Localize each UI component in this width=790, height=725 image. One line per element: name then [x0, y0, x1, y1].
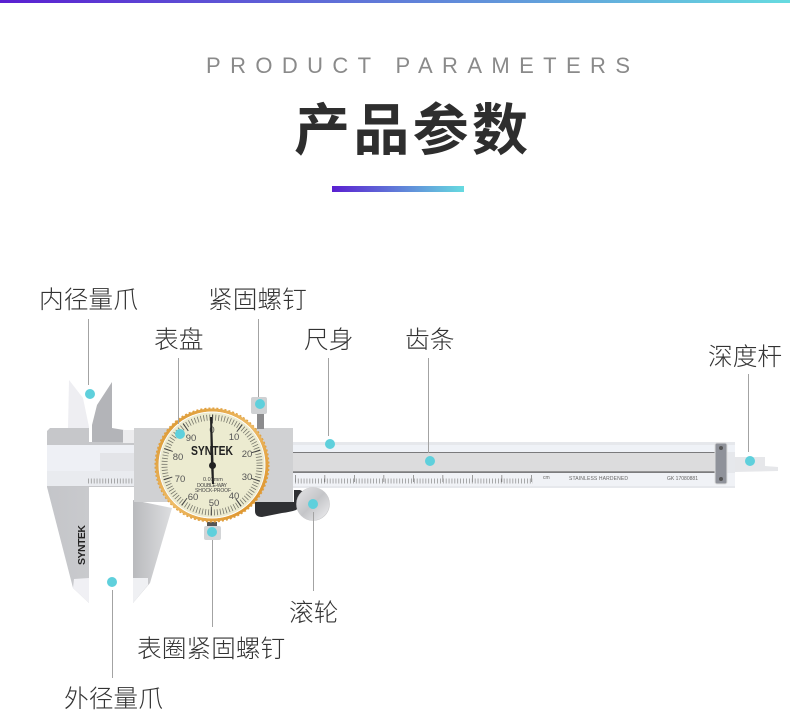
label: rack: 齿条	[405, 326, 454, 354]
dial	[156, 409, 268, 521]
dial: 20	[242, 449, 252, 460]
dial: 80	[173, 452, 183, 463]
dial: 60	[188, 492, 198, 503]
dial small text: 0.01mm	[203, 477, 223, 483]
upper right jaw	[92, 382, 124, 442]
top screw	[251, 397, 267, 429]
top gradient bar	[0, 0, 790, 3]
main beam: STAINLESS HARDENED	[569, 476, 628, 482]
label: inner jaw: 内径量爪	[39, 286, 138, 314]
dial brand: SYNTEK	[191, 443, 233, 458]
major ticks	[166, 419, 258, 511]
main beam: GK 17080881	[667, 476, 698, 482]
head ruler ticks	[88, 478, 134, 484]
thumb roller base	[255, 490, 312, 517]
label: outer jaw: 外径量爪	[64, 685, 163, 713]
subtitle: PRODUCT PARAMETERS	[206, 53, 630, 78]
fixed head	[47, 428, 135, 487]
marker dots	[85, 389, 755, 587]
caliper illustration	[47, 380, 778, 603]
thumb wheel	[296, 488, 330, 520]
ruler text: cm	[543, 475, 550, 481]
minor ticks	[164, 418, 260, 512]
dial: 70	[175, 474, 185, 485]
main beam	[293, 442, 735, 488]
clamp plate	[715, 443, 727, 484]
label: ruler body: 尺身	[304, 326, 353, 354]
dial: SHOCK-PROOF	[195, 488, 231, 494]
dial: 90	[186, 433, 196, 444]
brand text on jaw: SYNTEK	[76, 525, 88, 565]
depth rod	[735, 457, 778, 472]
label: depth rod: 深度杆	[708, 343, 782, 371]
lower left jaw	[47, 487, 89, 603]
title: 产品参数	[294, 99, 528, 162]
lower right jaw	[133, 500, 172, 603]
white strip	[47, 445, 134, 471]
label: bezel set screw: 表圈紧固螺钉	[137, 635, 285, 663]
label: set screw: 紧固螺钉	[208, 286, 307, 314]
ruler ticks	[295, 478, 533, 484]
dial: 40	[229, 491, 239, 502]
dial numbers: 0	[209, 425, 215, 436]
upper left jaw	[68, 380, 89, 442]
dial: DOUBLE-WAY	[197, 483, 228, 489]
bezel screw	[204, 522, 221, 540]
dial: 30	[242, 472, 252, 483]
dial: 10	[229, 432, 239, 443]
label: thumb wheel: 滚轮	[289, 599, 338, 627]
leader lines	[88, 319, 748, 678]
accent gradient bar	[332, 186, 464, 192]
slider block	[134, 428, 293, 502]
dial: 50	[209, 498, 219, 509]
dial needle	[210, 417, 214, 484]
label: dial: 表盘	[154, 326, 203, 354]
